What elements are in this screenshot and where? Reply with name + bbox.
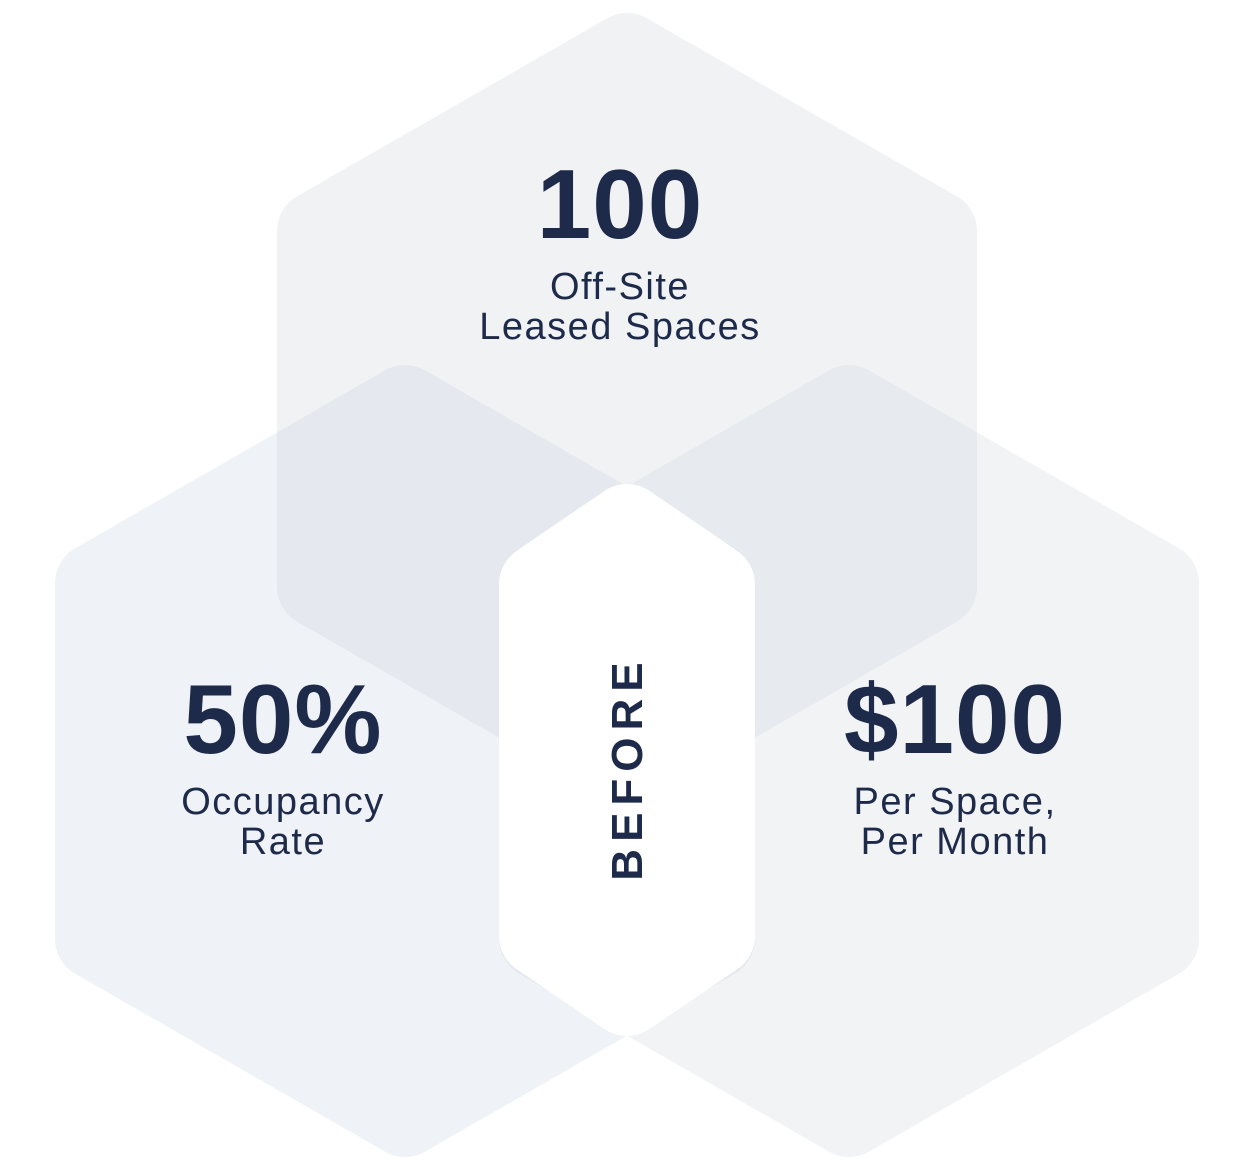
hexagon: top bbox=[317, 53, 937, 765]
label: BEFORE: BEFORE bbox=[603, 655, 652, 881]
hexagon: right bbox=[539, 405, 1159, 1117]
number 100: 100 bbox=[537, 149, 703, 259]
hexagon: left bbox=[95, 405, 715, 1117]
number 50%: 50% bbox=[183, 664, 383, 774]
label: Per Space, bbox=[854, 781, 1056, 823]
center white region bbox=[539, 524, 715, 996]
label: Per Month bbox=[861, 821, 1049, 863]
stat: 100 off-site leased spaces bbox=[479, 149, 761, 348]
label: Leased Spaces bbox=[479, 306, 761, 348]
label bbox=[854, 781, 1056, 863]
label bbox=[181, 781, 385, 863]
label bbox=[479, 266, 761, 348]
label: Rate bbox=[240, 821, 326, 863]
label: Off-Site bbox=[550, 266, 690, 308]
number $100: $100 bbox=[844, 664, 1066, 774]
label: Occupancy bbox=[181, 781, 385, 823]
stat: 50% occupancy rate bbox=[181, 664, 385, 863]
stat: $100 per space per month bbox=[844, 664, 1066, 863]
